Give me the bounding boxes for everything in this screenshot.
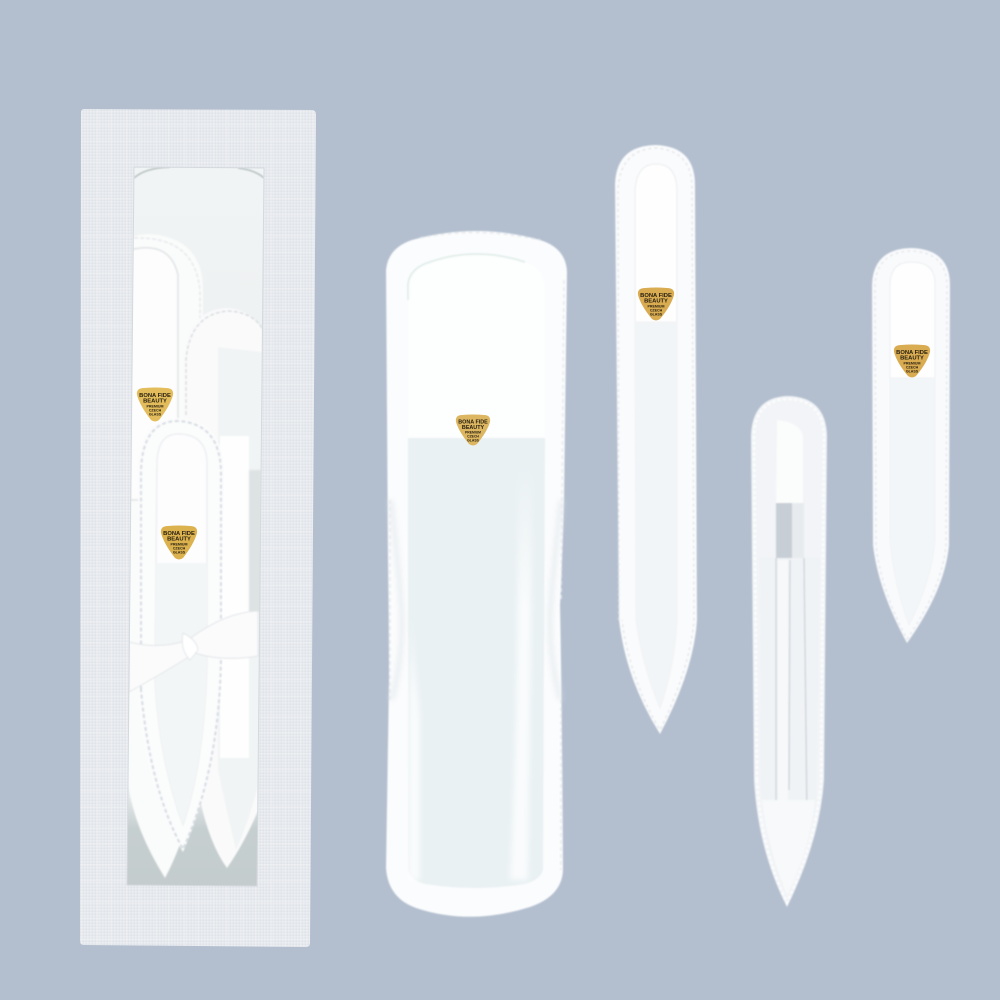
white inner part beside strip: [792, 503, 804, 558]
inner glass of back right file: [218, 347, 262, 850]
inner fold lower area: [760, 558, 820, 895]
sleeve outer: [386, 231, 567, 917]
panel: wide glass file in sleeve: [386, 231, 567, 917]
back left stitching: [134, 237, 201, 318]
brand pick on long file: BEAUTY: [644, 298, 668, 304]
glass upper: [635, 164, 677, 322]
back right stitching: [186, 311, 262, 415]
brand pick on wide file: GLASS: [467, 438, 480, 442]
front sleeve: [138, 418, 224, 852]
brand pick on wide file: BONA FIDE: [458, 420, 488, 426]
box linen frame: [80, 109, 316, 947]
box linen slub texture: [80, 109, 316, 947]
box window interior: [127, 167, 264, 886]
boxed file: back right: [183, 308, 266, 868]
ribbon knot: [182, 636, 198, 658]
ribbon band: [129, 611, 258, 692]
panel: long glass file: [615, 145, 697, 734]
brand pick on small file: BONA FIDE: [896, 350, 928, 356]
brand pick on wide file: BEAUTY: [462, 425, 484, 431]
brand pick on front boxed file: CZECH: [173, 546, 186, 550]
brand pick on back left boxed file: CZECH: [149, 408, 162, 412]
panel: small glass file: [872, 248, 950, 643]
brand pick on front boxed file: BONA FIDE: [163, 531, 195, 537]
brand pick on front boxed file: PREMIUM: [171, 542, 187, 546]
brand pick on back left boxed file: [137, 388, 173, 422]
brand pick on small file: PREMIUM: [904, 362, 920, 366]
front stitching: [141, 421, 221, 849]
inner stick lines: [776, 558, 807, 820]
glass lower frosted part: [408, 438, 545, 888]
brand pick on small file: CZECH: [906, 366, 919, 370]
brand pick on wide file: PREMIUM: [465, 430, 481, 434]
glass top edge: [408, 254, 525, 300]
sleeve outer: [751, 396, 827, 907]
back right sleeve: [199, 308, 262, 868]
brand pick on long file: GLASS: [650, 312, 663, 316]
front glass: [156, 434, 208, 562]
window edge shadow: [127, 167, 264, 886]
glass lower: [890, 378, 935, 625]
gloss highlight left: [408, 600, 420, 880]
brand pick on long file: PREMIUM: [648, 304, 664, 308]
brand pick on long file: [638, 288, 674, 320]
files inside box window: [125, 167, 266, 878]
brand pick on wide file: [456, 414, 490, 446]
glass lower: [635, 322, 677, 708]
panel: gift box with window: [80, 109, 316, 947]
brand pick on small file: BEAUTY: [900, 356, 924, 362]
brand pick on back left boxed file: BEAUTY: [143, 398, 167, 404]
brand pick on wide file: CZECH: [467, 434, 479, 438]
sleeve stitching: [875, 251, 947, 639]
brand pick on small file: [894, 344, 930, 378]
boxed file: back left: [125, 234, 203, 878]
sleeve outer: [615, 145, 697, 734]
sleeve stitching: [754, 399, 824, 903]
arcs at the top of the window: [134, 167, 264, 178]
inner file top: [776, 420, 803, 503]
brand pick on front boxed file: GLASS: [173, 550, 186, 554]
panel: translucent glass file with inner stick: [751, 396, 827, 907]
brand pick on front boxed file: BEAUTY: [167, 536, 191, 542]
glass upper: [408, 254, 545, 438]
lower tip highlight: [762, 800, 815, 895]
back left sleeve: [125, 234, 203, 878]
bright comb strip: [220, 436, 249, 758]
ribbon bow: [129, 611, 258, 692]
gloss highlight right: [510, 460, 533, 880]
dark strip at window right: [249, 470, 261, 612]
brand pick on back left boxed file: PREMIUM: [147, 404, 163, 408]
sleeve outer: [872, 248, 950, 643]
brand pick on back left boxed file: GLASS: [149, 412, 162, 416]
lower fold of front glass: [155, 563, 207, 825]
brand pick on back left boxed file: BONA FIDE: [139, 393, 171, 399]
brand pick on long file: BONA FIDE: [640, 293, 672, 299]
brand pick on long file: CZECH: [650, 308, 663, 312]
sleeve waist fold shading: [391, 500, 561, 700]
sleeve stitching: [618, 148, 694, 730]
brand pick on small file: GLASS: [906, 370, 919, 374]
grey grip strip: [776, 503, 792, 558]
brand pick on front boxed file: [161, 526, 197, 560]
glass upper: [890, 262, 935, 378]
boxed file: front: [138, 418, 224, 852]
back left glass: [130, 248, 178, 500]
inner stick body: [778, 560, 788, 800]
sleeve stitching: [390, 232, 564, 870]
